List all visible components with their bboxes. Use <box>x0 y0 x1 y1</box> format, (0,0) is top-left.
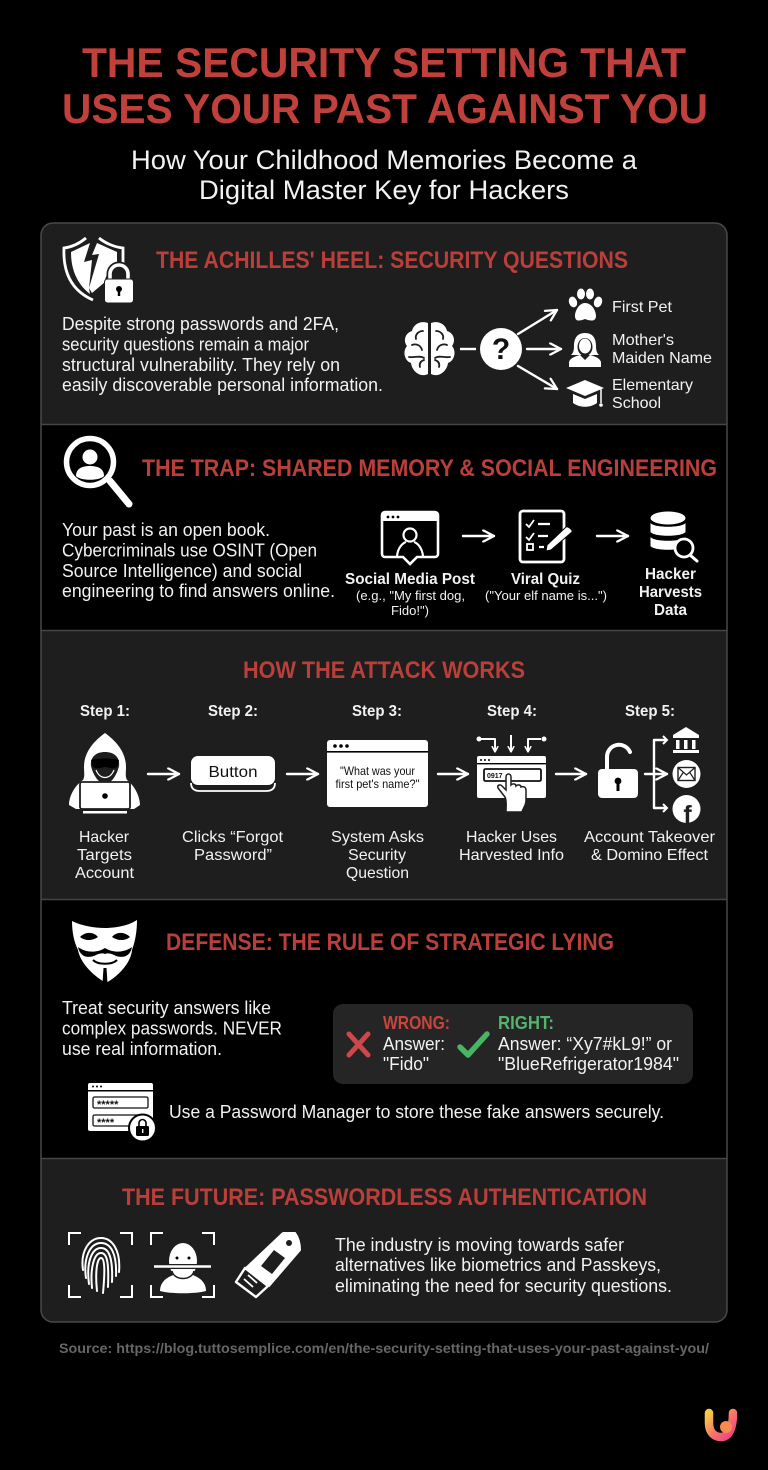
label: hacker harvests data: Hacker <box>645 566 696 583</box>
step 1 caption <box>75 829 135 882</box>
body text: use real information. <box>62 1039 222 1059</box>
step labels: Step 4: <box>487 703 537 720</box>
heading: THE TRAP: SHARED MEMORY & SOCIAL ENGINEERING <box>142 455 717 482</box>
label: viral quiz <box>485 571 607 603</box>
arrow <box>597 535 628 537</box>
body text: The industry is moving towards safer <box>335 1235 624 1255</box>
title <box>62 39 708 132</box>
label: social media post <box>345 571 476 618</box>
body text <box>62 998 282 1059</box>
label: hacker harvests data: Data <box>654 602 687 619</box>
step 4 caption: Hacker Uses <box>466 829 557 846</box>
step labels: Step 3: <box>352 703 402 720</box>
right answer: "BlueRefrigerator1984" <box>498 1054 679 1074</box>
icon: hacker enters harvested info: 0917 <box>487 773 503 780</box>
body text: easily discoverable personal information. <box>62 375 383 395</box>
wrong answer: Answer: <box>383 1034 445 1054</box>
password manager note: Use a Password Manager to store these fake answers securely. <box>169 1102 664 1122</box>
right answer: RIGHT: <box>498 1013 554 1033</box>
subtitle: Digital Master Key for Hackers <box>199 175 569 205</box>
step 2 caption <box>182 829 284 864</box>
fork arrows <box>645 736 667 812</box>
icon: button: Button <box>208 764 258 781</box>
title: USES YOUR PAST AGAINST YOU <box>62 85 708 132</box>
step 3 caption <box>331 829 424 882</box>
body text: structural vulnerability. They rely on <box>62 355 340 375</box>
panel: the trap <box>62 438 717 619</box>
icon: green check <box>460 1034 487 1055</box>
body text <box>335 1235 672 1296</box>
step 3 caption: Question <box>346 865 409 882</box>
icon: button <box>191 756 275 791</box>
body text <box>62 314 383 395</box>
body text <box>62 520 335 601</box>
step 2 caption: Password” <box>194 847 272 864</box>
label: first pet: First Pet <box>612 299 673 316</box>
logo <box>709 1413 733 1437</box>
label: social media post: (e.g., "My first dog, <box>356 588 465 603</box>
source line: Source: https://blog.tuttosemplice.com/en/the-security-setting-that-uses-your-past-against-you/ <box>59 1340 709 1356</box>
icon: question mark <box>480 328 522 370</box>
icon: quiz checklist <box>520 511 572 562</box>
body text: Cybercriminals use OSINT (Open <box>62 540 317 560</box>
icon: security question window <box>327 740 428 807</box>
step 3 caption: Security <box>348 847 406 864</box>
subtitle <box>131 145 638 205</box>
body text: Your past is an open book. <box>62 520 270 540</box>
step 5 caption: & Domino Effect <box>591 847 709 864</box>
icon: bank <box>673 727 699 753</box>
arrow <box>438 773 468 775</box>
step labels <box>80 703 675 720</box>
panel: security questions <box>62 238 712 412</box>
icon: brain <box>404 322 455 375</box>
icon: magnifier with person <box>66 438 129 504</box>
icon: facebook: f <box>683 801 692 829</box>
step 1 caption: Account <box>75 865 135 882</box>
step labels: Step 2: <box>208 703 258 720</box>
step 2 caption: Clicks “Forgot <box>182 829 284 846</box>
icon: guy fawkes mask <box>72 920 137 983</box>
panel: defense <box>62 920 693 1142</box>
step 4 caption: Harvested Info <box>459 847 564 864</box>
icon: social media post <box>382 512 438 564</box>
panel backgrounds <box>41 223 727 1322</box>
body text: eliminating the need for security questions. <box>335 1276 672 1296</box>
arrow <box>556 773 586 775</box>
step 5 caption: Account Takeover <box>584 829 716 846</box>
icon: usb security key <box>236 1233 300 1297</box>
label: viral quiz: ("Your elf name is...") <box>485 588 607 603</box>
label: mother's maiden name <box>612 332 712 367</box>
body text: Treat security answers like <box>62 998 271 1018</box>
label: mother's maiden name: Mother's <box>612 332 674 349</box>
wrong answer <box>383 1013 450 1074</box>
right answer <box>498 1013 679 1074</box>
step labels: Step 1: <box>80 703 130 720</box>
step labels: Step 5: <box>625 703 675 720</box>
step 4 caption <box>459 829 564 864</box>
arrow <box>463 535 494 537</box>
label: hacker harvests data: Harvests <box>639 584 702 601</box>
body text: alternatives like biometrics and Passkeys, <box>335 1255 661 1275</box>
panel: how the attack works <box>69 657 716 882</box>
step 1 caption: Targets <box>77 847 132 864</box>
panel: the future <box>69 1184 672 1297</box>
icon: security question window: "What was your <box>340 764 415 778</box>
arrow <box>287 773 318 775</box>
step 1 caption: Hacker <box>79 829 130 846</box>
label: social media post: Fido!") <box>391 603 429 618</box>
icon: face scan <box>151 1233 214 1297</box>
arrows to answers <box>518 310 561 389</box>
heading: THE ACHILLES' HEEL: SECURITY QUESTIONS <box>156 247 628 274</box>
step 5 caption <box>584 829 716 864</box>
icon: woman <box>569 333 601 367</box>
step 3 caption: System Asks <box>331 829 424 846</box>
wrong answer: WRONG: <box>383 1013 450 1033</box>
heading: THE FUTURE: PASSWORDLESS AUTHENTICATION <box>122 1184 647 1211</box>
icon: open lock <box>598 745 638 798</box>
icon: hacker with laptop <box>69 733 140 814</box>
body text: Despite strong passwords and 2FA, <box>62 314 339 334</box>
body text: complex passwords. NEVER <box>62 1018 282 1038</box>
icon: facebook <box>672 795 700 829</box>
label: elementary school <box>612 377 693 412</box>
right answer: Answer: “Xy7#kL9!” or <box>498 1034 672 1054</box>
title: THE SECURITY SETTING THAT <box>82 39 686 86</box>
label: mother's maiden name: Maiden Name <box>612 350 712 367</box>
icon: email <box>672 760 700 788</box>
label: hacker harvests data <box>639 566 702 619</box>
body text: Source Intelligence) and social <box>62 561 302 581</box>
connector <box>460 348 476 350</box>
label: elementary school: Elementary <box>612 377 693 394</box>
icon: password manager: **** <box>97 1117 115 1129</box>
label: elementary school: School <box>612 395 661 412</box>
wrong answer: "Fido" <box>383 1054 429 1074</box>
icon: database with magnifier <box>650 512 697 561</box>
callout: wrong vs right <box>333 1004 693 1084</box>
icon: graduation cap <box>566 380 604 407</box>
icon: red cross <box>349 1034 368 1055</box>
icon: paw <box>567 288 604 321</box>
label: viral quiz: Viral Quiz <box>511 571 580 588</box>
heading: HOW THE ATTACK WORKS <box>243 657 525 684</box>
icon: hacker enters harvested info <box>476 735 546 812</box>
icon: question mark: ? <box>492 333 510 366</box>
icon: password manager: ***** <box>97 1099 119 1111</box>
subtitle: How Your Childhood Memories Become a <box>131 145 638 175</box>
icon: broken shield with lock <box>64 238 134 303</box>
icon: fingerprint scan <box>69 1233 132 1297</box>
heading: DEFENSE: THE RULE OF STRATEGIC LYING <box>166 929 614 956</box>
icon: password manager <box>88 1083 156 1142</box>
arrow <box>148 773 179 775</box>
body text: engineering to find answers online. <box>62 581 335 601</box>
icon: security question window: first pet's name?" <box>336 777 420 791</box>
label: social media post: Social Media Post <box>345 571 476 588</box>
body text: security questions remain a major <box>62 334 309 354</box>
